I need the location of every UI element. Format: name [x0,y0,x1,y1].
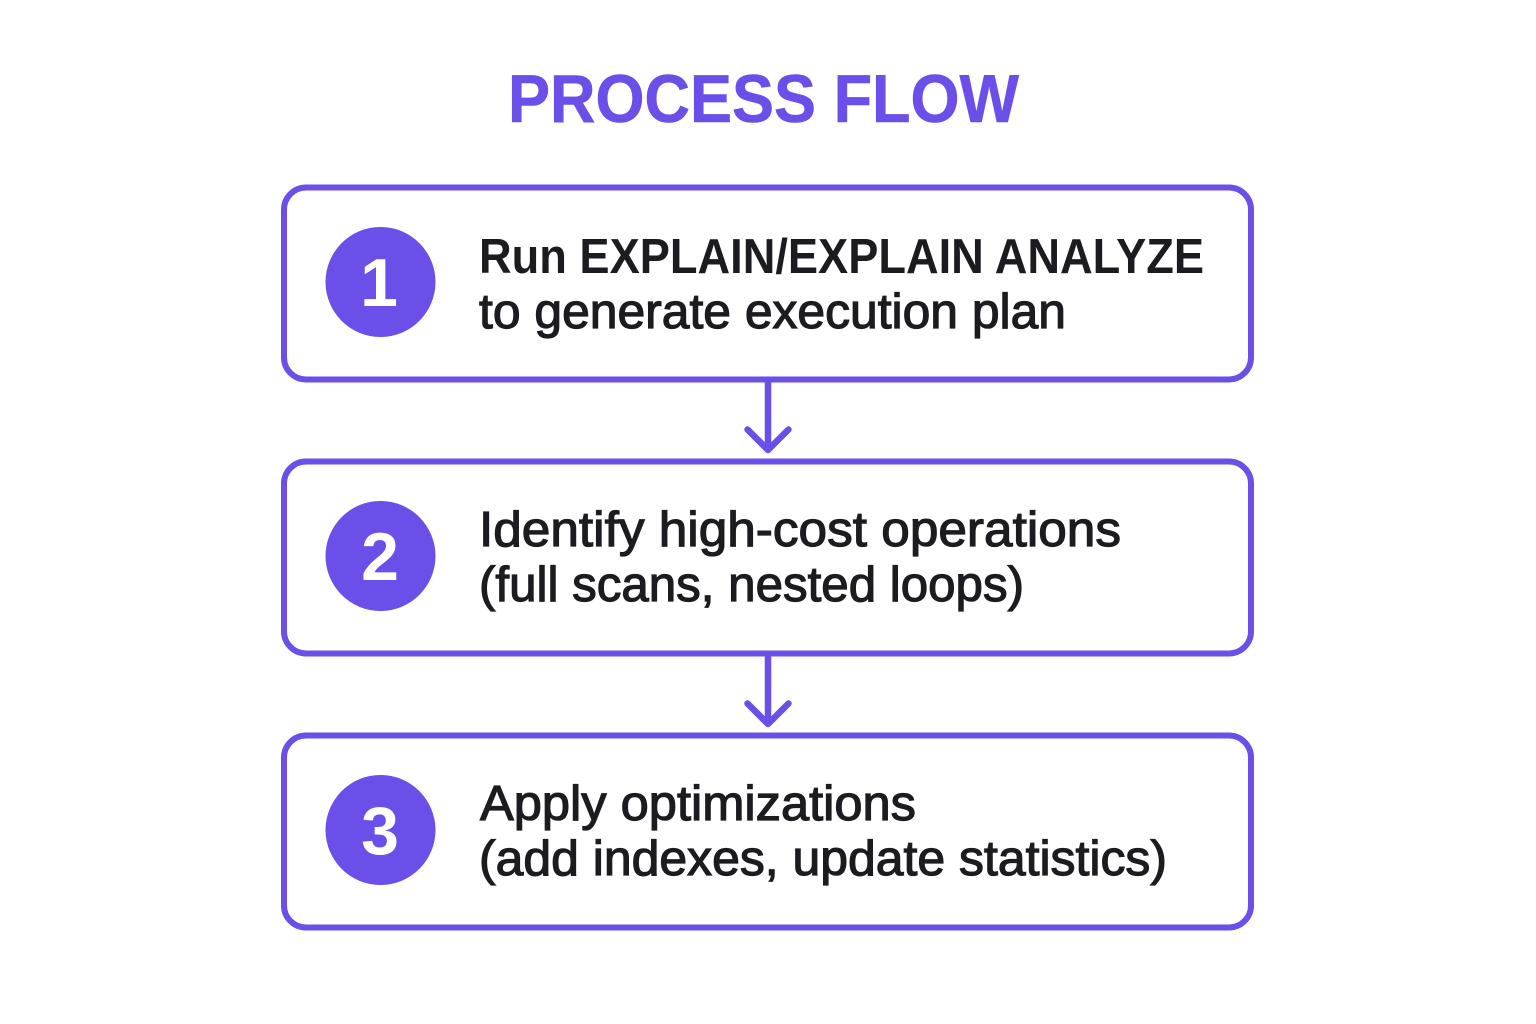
panel: step 1 [284,188,1251,380]
step 2 box [284,462,1251,654]
step 3 text [479,777,1167,886]
step 3 box [284,736,1251,928]
step 2 text: (full scans, nested loops) [479,558,1024,612]
step 1 text: to generate execution plan [479,285,1066,339]
panel: step 2 [284,462,1251,654]
step 2 text: Identify high-cost operations [479,503,1121,557]
step 1 number badge [326,227,436,337]
step 2 number badge: 2 [361,519,399,595]
step 3 number badge [326,775,436,885]
step 3 text: (add indexes, update statistics) [479,832,1167,886]
step 1 text [479,230,1204,339]
step 3 number badge: 3 [361,793,399,869]
panel: step 3 [284,736,1251,928]
arrow: step 2 to step 3 [748,654,788,724]
step 1 number badge: 1 [360,245,398,321]
step 1 box [284,188,1251,380]
step 3 text: Apply optimizations [480,777,916,831]
arrow: step 1 to step 2 [748,380,788,450]
step 1 text: Run EXPLAIN/EXPLAIN ANALYZE [479,230,1204,284]
step 2 number badge [326,501,436,611]
title: PROCESS FLOW [508,61,1020,137]
step 2 text [479,503,1121,612]
